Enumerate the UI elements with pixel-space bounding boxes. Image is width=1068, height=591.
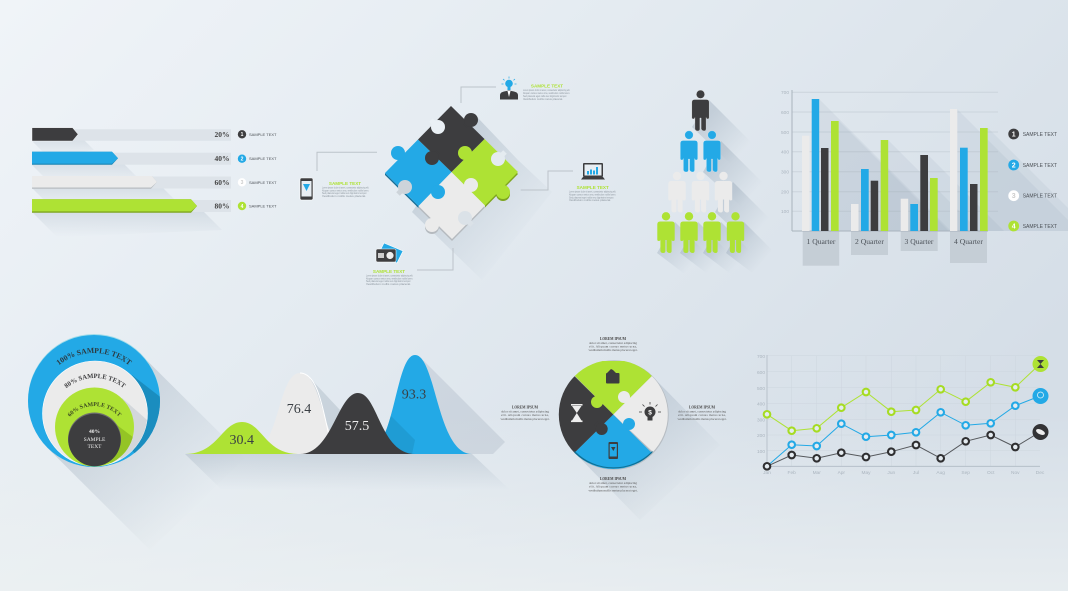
- line chart axis labels: 700: [757, 354, 765, 360]
- legend: progress bars: SAMPLE TEXT: [249, 156, 277, 161]
- curve: 30.4 green: [185, 422, 298, 454]
- text block: left: [322, 181, 369, 198]
- circle: 60%: 60% SAMPLE TEXT: [68, 402, 122, 416]
- text block: wheel left: elit. Aliquam cursus metus urna,: [501, 413, 549, 418]
- line chart axis labels: 300: [757, 418, 765, 424]
- circle: 80%: [42, 360, 148, 466]
- circle: 80%: 80% SAMPLE TEXT: [64, 374, 126, 388]
- text block: bottom: Aliquam cursus metus urna, vestibulum mollis lorem.: [366, 276, 413, 280]
- bar: 80%: [32, 199, 197, 213]
- circle: 40%: [68, 412, 121, 466]
- series: green line: [764, 356, 1048, 434]
- curve: 57.5 dark: 57.5: [345, 419, 369, 434]
- quarter labels: 4 Quarter: [954, 237, 983, 246]
- text block: bottom: SAMPLE TEXT: [373, 269, 405, 274]
- line chart axis labels: Dec: [1036, 470, 1045, 476]
- connector lines: [317, 87, 573, 270]
- line chart axis labels: Feb: [788, 470, 796, 476]
- legend: bar chart: SAMPLE TEXT: [1023, 224, 1057, 230]
- legend: bar chart: SAMPLE TEXT: [1023, 163, 1057, 169]
- text block: wheel right: elit. Aliquam cursus metus urna,: [678, 413, 726, 418]
- text block: right: Vestibulum mollis metus placerat.: [569, 198, 611, 202]
- axis labels: 600: [781, 110, 789, 116]
- line chart axis labels: 500: [757, 386, 765, 392]
- icon: smartphone: [608, 442, 618, 459]
- legend: progress bars: 1: [241, 132, 244, 138]
- text block: bottom: Vestibulum mollis metus placerat.: [366, 282, 411, 286]
- line chart axis labels: [757, 354, 1045, 476]
- text block: wheel left: dolor sit amet, consectetur adipiscing: [501, 410, 549, 414]
- percent labels: [214, 130, 230, 210]
- text block: top: [523, 84, 570, 101]
- line chart axis labels: 200: [757, 433, 765, 439]
- circle: 100%: 100% SAMPLE TEXT: [56, 348, 132, 365]
- line chart axis labels: Nov: [1011, 470, 1020, 476]
- wheel: quadrants: [556, 358, 670, 471]
- line chart axis labels: 400: [757, 402, 765, 408]
- percent labels: 60%: [214, 178, 230, 187]
- line chart axis labels: Sep: [961, 470, 970, 476]
- line chart axis labels: 100: [757, 449, 765, 455]
- line chart axis labels: Apr: [838, 470, 845, 476]
- panel: quarterly bar chart: [781, 90, 1068, 266]
- panel: puzzle wheel: [500, 337, 727, 520]
- legend: bar chart: 3: [1012, 193, 1016, 200]
- icon: phone: [300, 178, 313, 200]
- axis labels: 700: [781, 90, 789, 96]
- person: top dark: [692, 90, 709, 131]
- percent labels: 80%: [214, 202, 230, 210]
- line chart axis labels: Aug: [936, 470, 945, 476]
- line chart axis labels: Mar: [813, 470, 821, 476]
- line chart axis labels: Jan: [763, 470, 771, 476]
- bar: 20%: [32, 128, 78, 141]
- text block: right: Aliquam cursus metus urna, vestibulum mollis lorem.: [569, 193, 616, 197]
- legend: progress bars: SAMPLE TEXT: [249, 204, 277, 208]
- icon: dollar bulb: [639, 402, 661, 420]
- series: blue line: [767, 388, 1048, 466]
- text block: wheel bottom: [588, 477, 638, 492]
- text block: wheel left: vestibulum mollis metus placerat eget.: [500, 417, 550, 421]
- circle: 60%: [55, 388, 134, 466]
- text block: top: Aliquam cursus metus urna, vestibulum mollis lorem.: [523, 91, 570, 95]
- panel: jigsaw puzzle: [300, 76, 616, 286]
- circle: 40%: 40%: [89, 429, 100, 435]
- legend: bar chart: 1: [1012, 132, 1016, 138]
- text block: wheel right: [678, 406, 727, 421]
- panel: people pyramid: [657, 90, 772, 275]
- icon: laptop: [581, 163, 605, 180]
- text block: wheel right: dolor sit amet, consectetur adipiscing: [678, 410, 726, 414]
- axis labels: [781, 90, 789, 215]
- icon: credit cards: [376, 243, 403, 263]
- axis labels: 400: [781, 150, 789, 156]
- line chart axis labels: Jun: [887, 470, 895, 476]
- axis labels: 300: [781, 170, 789, 176]
- axis labels: 500: [781, 130, 789, 136]
- panel: bell curves: [185, 355, 505, 478]
- text block: bottom: [366, 269, 413, 286]
- series: dark line: [764, 424, 1048, 470]
- text block: right: [569, 185, 616, 202]
- bar: 60%: [32, 176, 157, 189]
- text block: wheel bottom: LOREM IPSUM: [600, 477, 627, 481]
- legend: bar chart: SAMPLE TEXT: [1023, 194, 1057, 200]
- text block: top: Lorem ipsum dolor sit amet, consectetur adipiscing elit.: [523, 88, 570, 92]
- bars: 3 Quarter: [901, 155, 938, 231]
- text block: top: Vestibulum mollis metus placerat.: [523, 97, 563, 101]
- text block: right: Sed placerat eget nulla nec dignissim tempor.: [569, 195, 614, 199]
- quarter labels: [807, 237, 983, 246]
- panel: progress bars: [32, 128, 277, 237]
- text block: wheel left: [500, 406, 550, 421]
- circle: 40%: SAMPLE: [84, 437, 106, 443]
- legend: progress bars: SAMPLE TEXT: [249, 132, 277, 137]
- text block: wheel left: LOREM IPSUM: [512, 406, 539, 410]
- text block: wheel top: vestibulum mollis metus placerat eget.: [588, 348, 638, 352]
- legend: progress bars: 2: [241, 156, 244, 162]
- text block: wheel top: elit. Aliquam cursus metus urna,: [589, 344, 637, 350]
- text block: wheel bottom: dolor sit amet, consectetur adipiscing: [589, 481, 637, 486]
- quarter labels: 2 Quarter: [855, 237, 884, 246]
- panel: nested circles: [28, 334, 220, 526]
- percent labels: 40%: [214, 154, 230, 163]
- line chart axis labels: Jul: [913, 470, 919, 476]
- curve: 93.3 blue: [385, 355, 472, 454]
- people: green row: [657, 212, 744, 253]
- circle: 100%: [28, 334, 160, 467]
- legend: progress bars: 4: [241, 204, 244, 210]
- legend: bar chart: [1008, 129, 1057, 231]
- icon: businessman with light bulb: [500, 76, 518, 100]
- line chart axis labels: May: [861, 470, 871, 476]
- text block: right: Lorem ipsum dolor sit amet, consectetur adipiscing elit.: [569, 190, 616, 194]
- text block: right: SAMPLE TEXT: [577, 185, 609, 190]
- text block: left: Sed placerat eget nulla nec dignissim tempor.: [322, 191, 367, 195]
- axis labels: 200: [781, 190, 789, 196]
- axis labels: 100: [781, 209, 789, 215]
- percent labels: 20%: [214, 130, 230, 139]
- bar: 40%: [32, 152, 118, 165]
- text block: bottom: Lorem ipsum dolor sit amet, consectetur adipiscing elit.: [366, 274, 413, 278]
- icon: dollar bulb: $: [648, 409, 652, 416]
- text block: top: SAMPLE TEXT: [531, 84, 563, 89]
- text block: wheel bottom: vestibulum mollis metus placerat eget.: [588, 488, 638, 492]
- legend: bar chart: 4: [1012, 224, 1016, 230]
- puzzle: white piece: [418, 172, 485, 241]
- bars: 2 Quarter: [851, 140, 888, 231]
- bars: 4 Quarter: [950, 109, 988, 231]
- legend: bar chart: 2: [1012, 162, 1016, 170]
- curve: 57.5 dark: [300, 393, 415, 454]
- panel: monthly line chart: [757, 354, 1048, 476]
- people: white row: [668, 172, 732, 212]
- legend: progress bars: 3: [241, 180, 244, 186]
- text block: wheel top: [588, 337, 638, 352]
- text block: left: Lorem ipsum dolor sit amet, consectetur adipiscing elit.: [322, 186, 369, 190]
- puzzle: dark piece: [418, 106, 484, 172]
- bars: 1 Quarter: [802, 99, 839, 231]
- legend: bar chart: SAMPLE TEXT: [1023, 132, 1057, 138]
- line chart axis labels: 600: [757, 370, 765, 376]
- text block: top: Sed placerat eget nulla nec dignissim tempor.: [523, 94, 567, 98]
- quarter bands: [803, 231, 987, 266]
- text block: left: SAMPLE TEXT: [329, 181, 361, 186]
- icon: hourglass: [571, 404, 582, 422]
- icon: wallet: [606, 369, 620, 384]
- curve: 76.4 white: 76.4: [287, 402, 311, 417]
- curve: 76.4 white: [248, 373, 352, 454]
- text block: left: Aliquam cursus metus urna, vestibulum mollis lorem.: [322, 188, 369, 192]
- people: blue row: [680, 131, 721, 172]
- line chart axis labels: Oct: [987, 470, 995, 476]
- curve: 30.4 green: 30.4: [229, 433, 254, 448]
- curve: 93.3 blue: 93.3: [402, 388, 426, 402]
- puzzle: green piece: [452, 139, 518, 208]
- puzzle: blue piece: [385, 140, 452, 208]
- text block: bottom: Sed placerat eget nulla nec dignissim tempor.: [366, 279, 411, 283]
- legend: progress bars: SAMPLE TEXT: [249, 180, 277, 185]
- quarter labels: 1 Quarter: [807, 237, 836, 246]
- text block: wheel top: LOREM IPSUM: [600, 337, 627, 341]
- text block: wheel right: LOREM IPSUM: [689, 406, 716, 410]
- text block: wheel top: dolor sit amet, consectetur adipiscing: [589, 341, 637, 346]
- text block: left: Vestibulum mollis metus placerat.: [322, 194, 366, 198]
- text block: wheel bottom: elit. Aliquam cursus metus urna,: [589, 484, 637, 490]
- circle: 40%: TEXT: [87, 444, 102, 450]
- legend: progress bars: [238, 130, 277, 210]
- quarter labels: 3 Quarter: [905, 237, 934, 246]
- text block: wheel right: vestibulum mollis metus placerat eget.: [678, 417, 727, 421]
